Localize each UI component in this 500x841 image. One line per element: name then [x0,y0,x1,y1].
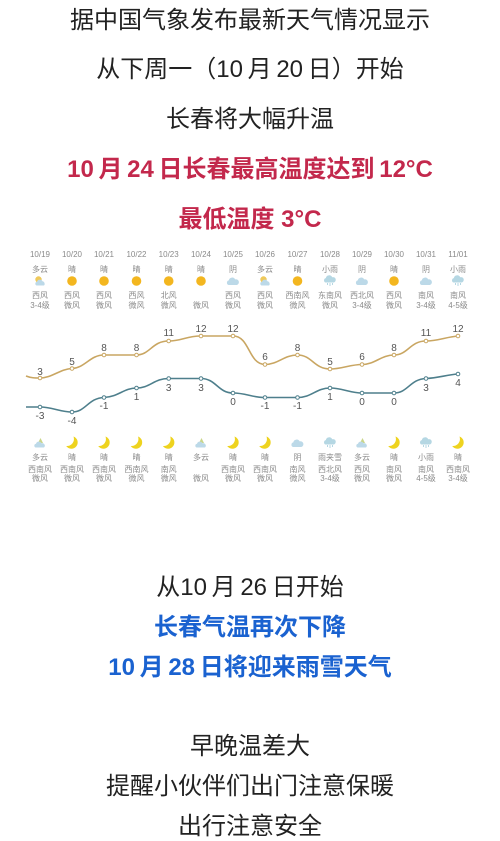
night 10/29 [354,438,370,483]
day 10/23: 10/23 [159,250,179,259]
day 10/22: 西风 [128,291,144,300]
day 10/26: 多云 [257,264,273,274]
low temperature line: 1 [327,392,333,403]
day 10/27: 10/27 [287,250,308,259]
day 10/29: 阴 [358,265,366,274]
high temperature line: 8 [134,343,140,354]
day 10/23: 晴 [165,264,173,274]
night 10/31 [416,437,436,483]
night 10/28: 3-4级 [320,473,340,483]
night 10/31: 南风 [418,464,434,474]
day 10/31: 阴 [422,265,430,274]
night 10/23: 晴 [165,452,173,462]
day 10/30: 微风 [386,300,402,310]
high temperature line: 5 [69,357,75,368]
night 10/25: 西南风 [221,464,245,474]
day 10/23: 微风 [161,300,177,310]
day 11/01 [448,250,468,310]
day 10/19: 西风 [32,291,48,300]
day 10/27 [286,250,310,310]
night 10/25: 微风 [225,473,241,483]
red highlight: highest temperature: 10 月 24 日长春最高温度达到 12°C [67,156,433,183]
low temperature line: -1 [293,401,302,412]
day 10/26 [255,250,276,310]
night 10/22 [124,436,148,483]
night 10/21: 微风 [96,473,112,483]
day 10/25: 西风 [225,291,241,300]
night 10/29: 多云 [354,452,370,462]
night 10/24: 微风 [193,473,209,483]
day 10/27: 西南风 [286,290,310,300]
day 10/22: 晴 [132,264,140,274]
day 10/31 [416,250,437,310]
low temperature line: 0 [359,397,365,408]
high temperature line: 12 [195,324,207,335]
night 10/28: 西北风 [318,465,342,474]
high temperature line: 8 [101,343,107,354]
day 10/19 [30,250,51,310]
day 10/24: 微风 [193,300,209,310]
night 10/31: 4-5级 [416,473,436,483]
high temperature line [26,324,464,380]
low temperature line [26,372,461,427]
day 10/22: 10/22 [126,250,147,259]
night 10/23: 南风 [161,464,177,474]
low temperature line: 1 [134,392,140,403]
day 10/24 [191,250,212,310]
day 10/20 [62,250,83,310]
day 10/21 [94,250,115,310]
night 10/19: 微风 [32,473,48,483]
night 10/20: 晴 [68,452,76,462]
day 10/20: 西风 [64,291,80,300]
day 10/30: 西风 [386,291,402,300]
night 11/01 [446,436,470,483]
day 10/31: 南风 [418,290,434,300]
high temperature line: 12 [227,324,239,335]
high temperature line: 6 [262,352,268,363]
night 11/01: 西南风 [446,464,470,474]
low temperature line: 0 [391,397,397,408]
red highlight: lowest temperature: 最低温度 3°C [179,206,321,233]
day 10/28: 微风 [322,300,338,310]
night 10/27 [290,440,306,483]
day 11/01: 南风 [450,290,466,300]
heading line 2: 从下周一（10 月 20 日）开始 [96,56,404,83]
day 10/28: 小雨 [322,265,338,274]
low temperature line: -3 [36,411,45,422]
day 10/21: 晴 [100,264,108,274]
night 10/19: 多云 [32,452,48,462]
night 10/28 [318,437,342,483]
night 11/01: 3-4级 [448,473,468,483]
high temperature line: 11 [421,328,432,339]
reminder line 1: 早晚温差大 [190,733,310,760]
night 10/19: 西南风 [28,464,52,474]
night 10/26 [253,436,277,483]
low temperature line: 4 [455,378,461,389]
day 11/01: 4-5级 [448,300,468,310]
day 10/22 [126,250,147,310]
day 10/28 [318,250,342,310]
day 10/31: 10/31 [416,250,437,259]
day 10/29: 西北风 [350,291,374,300]
day 10/30 [384,250,405,310]
night 11/01: 晴 [454,452,462,462]
night 10/29: 西风 [354,465,370,474]
reminder line 3: 出行注意安全 [178,813,322,840]
night 10/25: 晴 [229,452,237,462]
night 10/30: 南风 [386,464,402,474]
day 10/20: 晴 [68,264,76,274]
night 10/22: 西南风 [124,464,148,474]
low temperature line: 0 [230,397,236,408]
night 10/19 [28,438,52,483]
low temperature line: -4 [68,416,77,427]
high temperature line: 3 [37,367,43,378]
night 10/21 [92,436,116,483]
weather forecast chart [26,250,470,483]
day 10/20: 微风 [64,300,80,310]
day 10/22: 微风 [128,300,144,310]
day 10/29: 3-4级 [352,300,372,310]
low temperature line: 3 [423,383,429,394]
day 10/28: 10/28 [320,250,341,259]
night 10/24: 多云 [193,452,209,462]
night 10/23: 微风 [161,473,177,483]
night 10/21: 西南风 [92,464,116,474]
day 10/19: 10/19 [30,250,51,259]
night 10/30: 微风 [386,473,402,483]
day 10/26: 微风 [257,300,273,310]
day 10/23: 北风 [161,291,177,300]
day 11/01: 小雨 [450,265,466,274]
night 10/28: 雨夹雪 [318,452,342,462]
night 10/20: 微风 [64,473,80,483]
daytime forecast row [30,250,468,310]
night 10/22: 微风 [128,473,144,483]
day 10/26: 西风 [257,291,273,300]
night 10/30 [386,436,402,483]
high temperature line: 12 [452,324,464,335]
night 10/20 [60,436,84,483]
day 11/01: 11/01 [448,250,468,259]
day 10/28: 东南风 [318,290,342,300]
high temperature line: 5 [327,357,333,368]
day 10/23 [159,250,179,310]
day 10/30: 10/30 [384,250,405,259]
low temperature line: 3 [166,383,172,394]
night 10/30: 晴 [390,452,398,462]
night 10/22: 晴 [132,452,140,462]
blue highlight: rain and snow: 10 月 28 日将迎来雨雪天气 [108,654,392,681]
day 10/21: 10/21 [94,250,115,259]
day 10/27: 微风 [290,300,306,310]
day 10/19: 3-4级 [30,300,50,310]
low temperature line: 3 [198,383,204,394]
day 10/19: 多云 [32,264,48,274]
blue highlight: temperature drop: 长春气温再次下降 [154,614,346,641]
night forecast row [28,436,470,483]
day 10/21: 西风 [96,291,112,300]
night 10/24 [193,438,209,483]
day 10/30: 晴 [390,264,398,274]
day 10/31: 3-4级 [416,300,436,310]
high temperature line: 6 [359,352,365,363]
day 10/26: 10/26 [255,250,276,259]
day 10/25: 微风 [225,300,241,310]
day 10/27: 晴 [294,264,302,274]
night 10/27: 微风 [290,473,306,483]
day 10/21: 微风 [96,300,112,310]
high temperature line: 11 [164,328,174,339]
night 10/26: 微风 [257,473,273,483]
day 10/24: 晴 [197,264,205,274]
text: cooling start date: 从10 月 26 日开始 [156,574,344,601]
low temperature line: -1 [261,401,270,412]
day 10/20: 10/20 [62,250,83,259]
night 10/26: 晴 [261,452,269,462]
day 10/25: 10/25 [223,250,244,259]
night 10/27: 阴 [294,453,302,462]
night 10/20: 西南风 [60,464,84,474]
high temperature line: 8 [295,343,301,354]
high temperature line: 8 [391,343,397,354]
night 10/23 [161,436,177,483]
night 10/31: 小雨 [418,453,434,462]
night 10/27: 南风 [290,464,306,474]
day 10/25: 阴 [229,265,237,274]
day 10/25 [223,250,244,310]
reminder line 2: 提醒小伙伴们出门注意保暖 [106,773,394,800]
day 10/29 [350,250,374,310]
low temperature line: -1 [100,401,109,412]
day 10/29: 10/29 [352,250,373,259]
night 10/26: 西南风 [253,464,277,474]
heading line 3: 长春将大幅升温 [166,106,334,133]
day 10/24: 10/24 [191,250,212,259]
heading line 1: 据中国气象发布最新天气情况显示 [70,7,430,34]
night 10/21: 晴 [100,452,108,462]
night 10/25 [221,436,245,483]
night 10/29: 微风 [354,473,370,483]
